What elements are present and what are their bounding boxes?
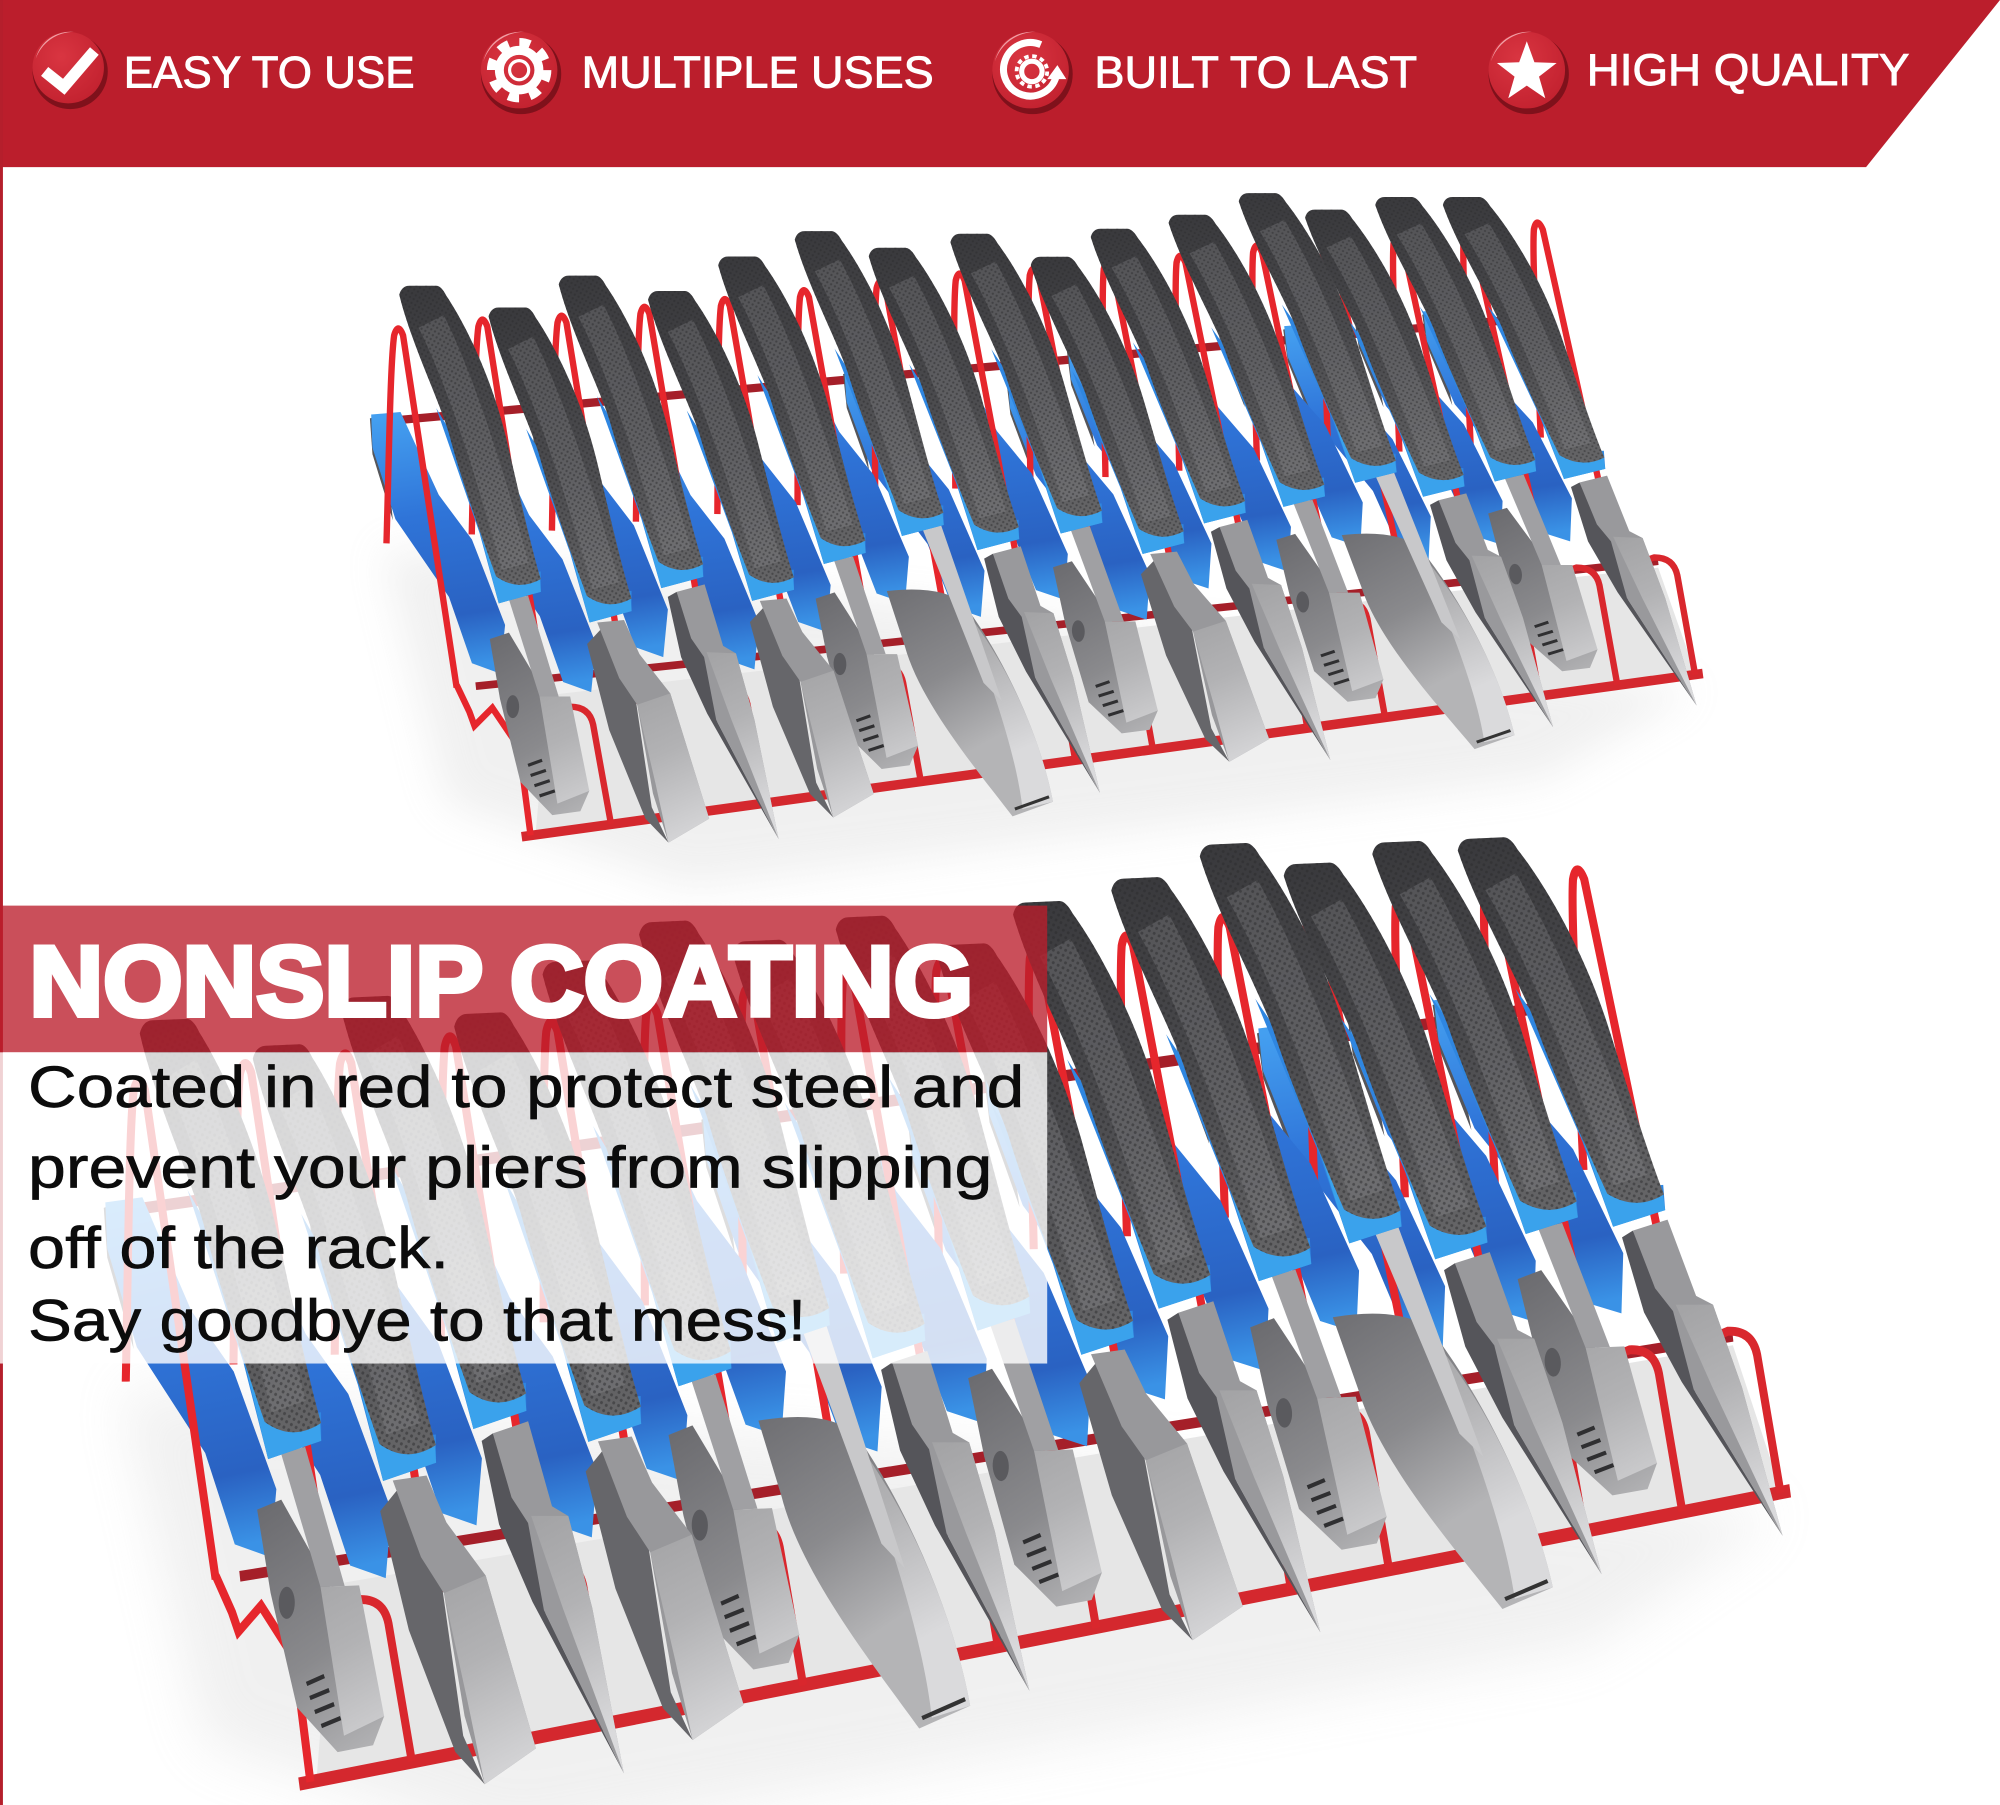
- body line 3: off of the rack.: [28, 1216, 449, 1281]
- plier 15: needle nose: [1422, 197, 1697, 706]
- icon: cycle with gear: [992, 32, 1073, 114]
- plier 1: slip joint: [370, 286, 589, 835]
- plier 8: slip joint: [925, 234, 1159, 733]
- plier 5: slip joint: [691, 257, 919, 769]
- left edge stripe: [0, 0, 3, 1805]
- plier 2: linesman: [460, 307, 709, 843]
- label: built to last: BUILT TO LAST: [1094, 48, 1417, 97]
- plier 6: wide jaw: [768, 231, 1053, 816]
- label: high quality: HIGH QUALITY: [1587, 46, 1909, 95]
- plier 9: linesman: [1006, 257, 1270, 762]
- plier 4: linesman: [620, 291, 874, 818]
- label: multiple uses: MULTIPLE USES: [582, 48, 934, 97]
- body line 2: prevent your pliers from slipping: [28, 1136, 992, 1201]
- body line 4: Say goodbye to that mess!: [28, 1289, 806, 1354]
- plier 10: needle nose: [1067, 229, 1330, 760]
- icon: gear: [481, 32, 561, 114]
- rack base plate and wire bars: [389, 223, 1703, 837]
- body line 1: Coated in red to protect steel and: [28, 1055, 1024, 1120]
- plier 14: slip joint: [1354, 197, 1599, 671]
- header banner: [0, 0, 2000, 167]
- heading: NONSLIP COATING: [29, 926, 973, 1037]
- icon: star: [1489, 32, 1569, 114]
- plier 11: slip joint: [1145, 215, 1385, 702]
- label: easy to use: EASY TO USE: [124, 48, 415, 97]
- icon: check mark: [33, 32, 108, 109]
- plier 13: needle nose: [1283, 210, 1553, 727]
- ground shadow: [383, 548, 1696, 886]
- plier 12: wide jaw: [1216, 193, 1515, 749]
- plier 7: needle nose: [843, 248, 1100, 793]
- panel: description text: [0, 1052, 1047, 1364]
- plier rack: top: [370, 193, 1703, 886]
- plier rack: bottom: [102, 819, 1792, 1805]
- plier 3: needle nose: [531, 276, 779, 839]
- panel: nonslip coating title band: [0, 906, 1047, 1052]
